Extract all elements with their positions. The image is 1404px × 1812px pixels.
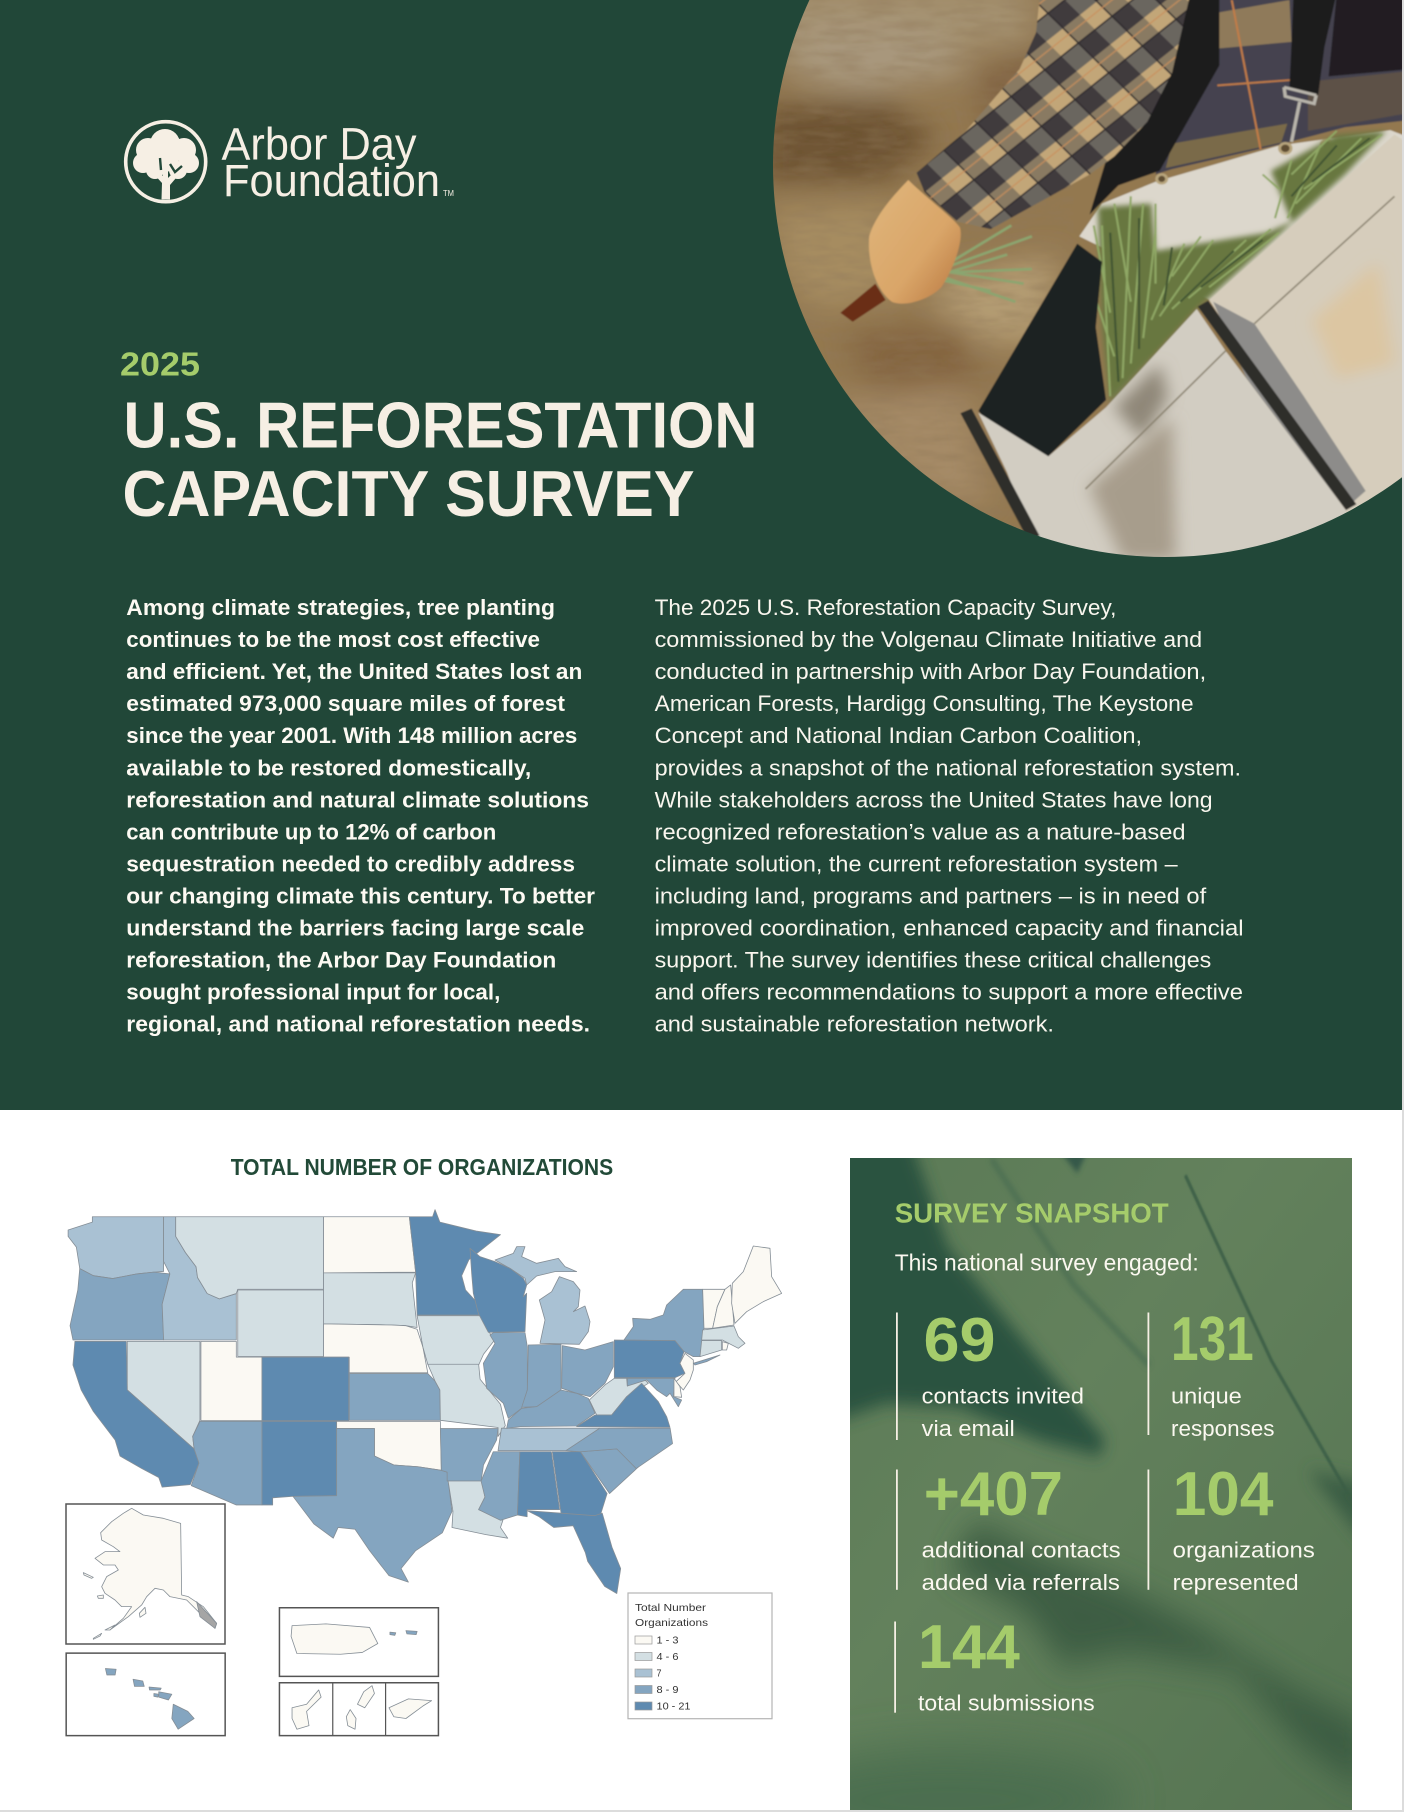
intro text: left column: and efficient. Yet, the United States lost an	[126, 659, 582, 684]
pine seedlings in bag	[1081, 131, 1386, 404]
map legend	[628, 1593, 772, 1719]
intro text: left column: estimated 973,000 square miles of forest	[126, 691, 566, 716]
stat: 69 contacts invited: via email	[922, 1416, 1015, 1441]
snapshot heading: SURVEY SNAPSHOT	[895, 1198, 1169, 1229]
inset: Hawaii	[66, 1653, 225, 1736]
intro text: left column: since the year 2001. With 148 million acres	[126, 723, 577, 748]
stat: 104 organizations: organizations	[1173, 1537, 1315, 1562]
dark shadow under arm	[1090, 0, 1219, 215]
map legend: 4 - 6	[656, 1651, 679, 1663]
intro text: right column: commissioned by the Volgenau Climate Initiative and	[655, 627, 1202, 652]
panel: survey snapshot	[850, 1158, 1352, 1810]
logo	[126, 118, 454, 206]
intro text: left column: our changing climate this century. To better	[126, 884, 595, 908]
stat: 131 unique responses	[1148, 1305, 1274, 1441]
photo: worker planting seedlings	[752, 0, 1404, 582]
snapshot intro: This national survey engaged:	[895, 1249, 1199, 1275]
intro text: left column: available to be restored domestically,	[126, 755, 531, 780]
back of planting bag	[1079, 130, 1404, 302]
choropleth map of the United States	[68, 1210, 782, 1594]
stat: 131 unique responses: responses	[1171, 1416, 1274, 1441]
survey year: 2025	[120, 346, 200, 383]
map legend: Total Number	[635, 1602, 707, 1614]
intro text: left column: continues to be the most cost effective	[126, 627, 540, 652]
map legend: 10 - 21	[656, 1701, 691, 1713]
intro text: left column: sequestration needed to credibly address	[126, 851, 575, 876]
intro text: left column: reforestation, the Arbor Day Foundation	[126, 948, 556, 973]
stat: 144 total submissions: total submissions	[918, 1691, 1095, 1716]
panel background with blurred leaf	[850, 1158, 1352, 1810]
intro text: left column: can contribute up to 12% of carbon	[126, 819, 496, 844]
intro text: right column: and offers recommendations to support a more effective	[655, 980, 1243, 1005]
header panel	[0, 0, 1404, 1110]
stat: +407 additional contacts: added via referrals	[922, 1570, 1120, 1595]
intro text: left column: regional, and national reforestation needs.	[126, 1012, 590, 1037]
stat: 104 organizations	[1148, 1460, 1315, 1595]
intro text: right column: conducted in partnership with Arbor Day Foundation,	[655, 659, 1206, 684]
intro text: right column: recognized reforestation’s value as a nature-based	[655, 819, 1186, 844]
stat: 144 total submissions: 144	[918, 1613, 1020, 1682]
torso plaid shirt	[1156, 0, 1404, 175]
grommets	[1157, 140, 1332, 183]
logo wordmark	[222, 118, 454, 206]
intro text: right column: Concept and National Indian Carbon Coalition,	[655, 723, 1142, 748]
front left bag flap	[978, 308, 1346, 557]
stat: +407 additional contacts: additional contacts	[922, 1537, 1121, 1562]
map legend: Organizations	[635, 1617, 708, 1629]
inset: Puerto Rico	[279, 1608, 438, 1676]
stat: 104 organizations: 104	[1173, 1460, 1274, 1529]
intro text: right column: American Forests, Hardigg Consulting, The Keystone	[655, 691, 1194, 716]
map legend: 7	[656, 1667, 662, 1679]
stat: +407 additional contacts: +407	[924, 1460, 1063, 1529]
suspender strap and pocket	[1284, 0, 1404, 142]
inset: Pacific territories	[279, 1683, 438, 1736]
blurred field background	[773, 0, 1402, 531]
intro text: left column: sought professional input for local,	[126, 980, 500, 1005]
intro text: right column: and sustainable reforestation network.	[655, 1012, 1054, 1037]
map legend: 8 - 9	[656, 1684, 679, 1696]
stat: +407 additional contacts	[896, 1460, 1121, 1595]
stat: 144 total submissions	[894, 1613, 1095, 1716]
intro text: right column	[655, 595, 1244, 1037]
stat: 69 contacts invited: 69	[924, 1306, 996, 1375]
icon: tree in circle	[126, 122, 206, 202]
stat: 131 unique responses: unique	[1171, 1383, 1242, 1408]
intro text: left column	[126, 595, 595, 1037]
gloved hand holding seedling	[840, 180, 1032, 322]
title: CAPACITY SURVEY	[122, 457, 694, 530]
title	[122, 388, 758, 530]
logo wordmark: Foundation	[223, 155, 440, 206]
intro text: right column: climate solution, the current reforestation system –	[655, 851, 1178, 876]
dark bag interior	[978, 244, 1106, 456]
plaid sleeve	[917, 0, 1191, 229]
intro text: right column: The 2025 U.S. Reforestation Capacity Survey,	[655, 595, 1116, 620]
logo wordmark: Arbor Day	[222, 118, 417, 169]
intro text: right column: including land, programs and partners – is in need of	[655, 884, 1207, 908]
logo wordmark: TM	[443, 189, 454, 198]
inset: Alaska	[66, 1504, 225, 1644]
intro text: left column: reforestation and natural climate solutions	[126, 787, 589, 812]
map legend: 1 - 3	[656, 1634, 679, 1646]
intro text: left column: Among climate strategies, tree planting	[126, 595, 555, 620]
map heading: TOTAL NUMBER OF ORGANIZATIONS	[231, 1154, 613, 1180]
intro text: left column: understand the barriers facing large scale	[126, 916, 584, 940]
intro text: right column: provides a snapshot of the national reforestation system.	[655, 755, 1241, 780]
stat: 104 organizations: represented	[1173, 1570, 1299, 1595]
title: U.S. REFORESTATION	[124, 388, 758, 461]
intro text: right column: While stakeholders across the United States have long	[655, 787, 1213, 812]
intro text: right column: improved coordination, enhanced capacity and financial	[655, 916, 1244, 940]
bag hems	[966, 304, 1351, 538]
stat: 131 unique responses: 131	[1171, 1305, 1254, 1374]
front right bag flap	[1208, 135, 1402, 513]
stat: 69 contacts invited: contacts invited	[922, 1383, 1084, 1408]
intro text: right column: support. The survey identifies these critical challenges	[655, 948, 1211, 973]
stat: 69 contacts invited	[896, 1306, 1084, 1441]
